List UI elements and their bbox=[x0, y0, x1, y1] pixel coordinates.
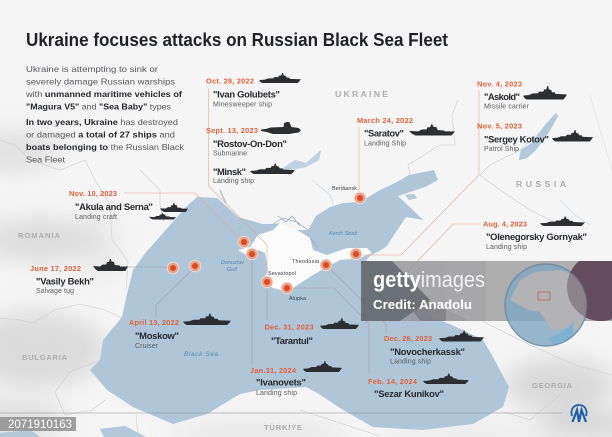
watermark band bbox=[361, 261, 612, 321]
intro text: or damaged a total of 27 ships and bbox=[26, 130, 175, 140]
leader lines bbox=[124, 88, 481, 374]
ship: Sezar Kunikov: Feb. 14, 2024 bbox=[368, 377, 418, 386]
ship: Ivan Golubets bbox=[206, 73, 301, 108]
ship: Akula and Serna: Nov. 10, 2023 bbox=[69, 189, 117, 198]
watermark line bbox=[0, 412, 562, 414]
place labels: Kerch Strait bbox=[329, 231, 358, 237]
ship: Ivanovets: Jan.31, 2024 bbox=[250, 366, 297, 375]
place labels: Black Sea bbox=[184, 351, 219, 358]
country labels bbox=[18, 89, 573, 432]
ship: Tarantul bbox=[264, 318, 359, 346]
intro text: severely damage Russian warships bbox=[26, 76, 175, 86]
ship: Akula and Serna: "Akula and Serna" bbox=[75, 201, 153, 212]
ship: Askold: "Askold" bbox=[484, 91, 520, 102]
intro text bbox=[25, 64, 185, 164]
ship: Vasily Bekh: Salvage tug bbox=[36, 288, 74, 295]
ship: Vasily Bekh bbox=[30, 259, 128, 295]
ship: Ivan Golubets: "Ivan Golubets" bbox=[213, 88, 280, 100]
ship: Novocherkassk: Landing ship bbox=[390, 358, 431, 366]
intro text: Sea Fleet bbox=[26, 154, 66, 164]
ship: Sezar Kunikov: "Sezar Kunikov" bbox=[374, 388, 444, 399]
Crimea bbox=[238, 223, 372, 292]
borders and rivers bbox=[0, 95, 612, 437]
attack location markers bbox=[167, 192, 399, 294]
place labels: Gulf bbox=[227, 267, 238, 273]
ship: Askold: Missile carrier bbox=[484, 104, 530, 110]
icon: Anadolu logo bbox=[571, 405, 587, 422]
place labels: Sevastopol bbox=[268, 271, 296, 277]
ship: Rostov-On-Don bbox=[206, 122, 301, 158]
country labels: ROMANIA bbox=[18, 231, 61, 240]
ship: Rostov-On-Don: "Rostov-On-Don" bbox=[213, 138, 287, 149]
ship: Ivan Golubets: Minesweeper ship bbox=[213, 102, 272, 108]
ship: Saratov: March 24, 2022 bbox=[357, 116, 413, 125]
ship: Ivanovets bbox=[250, 361, 342, 397]
ship: Sergey Kotov: Patrol Ship bbox=[484, 146, 519, 153]
ship: Olenegorsky Gornyak: Aug. 4, 2023 bbox=[483, 220, 527, 228]
intro text: Ukraine is attempting to sink or bbox=[26, 64, 158, 74]
ship: Akula and Serna: Landing craft bbox=[75, 214, 117, 221]
ship: Minsk: "Minsk" bbox=[213, 166, 246, 177]
watermark text bbox=[373, 267, 485, 312]
watermark text: Credit: Anadolu bbox=[373, 297, 472, 312]
ship: Sergey Kotov: Nov. 5, 2023 bbox=[477, 122, 522, 130]
country labels: TÜRKİYE bbox=[264, 423, 303, 432]
ship: Saratov: Landing Ship bbox=[364, 140, 406, 148]
place labels: Donuzlav bbox=[221, 260, 244, 266]
ship: Olenegorsky Gornyak: Landing ship bbox=[486, 244, 527, 251]
ship: Sezar Kunikov bbox=[368, 374, 469, 399]
ship: Saratov bbox=[357, 116, 455, 148]
ship: Ivan Golubets: Oct. 29, 2022 bbox=[206, 76, 254, 86]
ship: Vasily Bekh: "Vasily Bekh" bbox=[36, 276, 94, 286]
ship: Moskow: April 13, 2022 bbox=[129, 318, 179, 327]
ship: Tarantul: Dec. 31, 2023 bbox=[264, 322, 314, 332]
terrain shading bbox=[0, 128, 612, 437]
ship: Ivanovets: "Ivanovets" bbox=[256, 376, 306, 388]
ship: Tarantul: "Tarantul" bbox=[271, 335, 313, 346]
intro text: with unmanned maritime vehicles of bbox=[25, 89, 182, 99]
ship: Moskow: "Moskow" bbox=[135, 330, 179, 341]
title: Ukraine focuses attacks on Russian Black Sea Fleet bbox=[26, 30, 448, 50]
intro text: boats belonging to the Russian Black bbox=[26, 142, 185, 152]
ship: Minsk bbox=[213, 164, 295, 185]
ship: Saratov: "Saratov" bbox=[364, 128, 404, 138]
ship: Olenegorsky Gornyak bbox=[483, 216, 587, 251]
place labels bbox=[184, 186, 358, 358]
ship: Rostov-On-Don: Submarine bbox=[213, 150, 247, 158]
country labels: RUSSIA bbox=[516, 179, 567, 189]
ship: Ivanovets: Landing ship bbox=[256, 390, 297, 397]
Black Sea bbox=[90, 170, 509, 430]
ship: Moskow bbox=[129, 314, 231, 350]
image id badge: 2071910163 bbox=[8, 419, 72, 431]
Sivash marshes bbox=[273, 216, 318, 248]
ship: Askold: Nov. 4, 2023 bbox=[477, 80, 522, 88]
place labels: Berdiansk bbox=[332, 186, 357, 192]
ship: Vasily Bekh: June 17, 2022 bbox=[30, 264, 81, 273]
ship: Sergey Kotov: "Sergey Kotov" bbox=[484, 134, 549, 144]
ship: Olenegorsky Gornyak: "Olenegorsky Gornyak" bbox=[486, 231, 587, 242]
watermark dark circle bbox=[570, 261, 612, 321]
ship: Akula and Serna bbox=[69, 189, 188, 221]
intro text: In two years, Ukraine has destroyed bbox=[26, 117, 178, 127]
place labels: Alupka bbox=[289, 296, 306, 302]
ship: Novocherkassk: "Novocherkassk" bbox=[390, 346, 465, 357]
watermark text: gettyimages bbox=[373, 267, 485, 292]
locator globe bbox=[505, 253, 612, 348]
intro text: "Magura V5" and "Sea Baby" types bbox=[26, 102, 171, 112]
country labels: UKRAINE bbox=[335, 89, 389, 99]
ship: Sergey Kotov bbox=[477, 122, 593, 153]
ship: Minsk: Landing ship bbox=[213, 178, 254, 185]
rivers and reservoirs bbox=[0, 113, 590, 437]
ship: Novocherkassk: Dec. 26, 2023 bbox=[384, 334, 432, 343]
country labels: BULGARIA bbox=[22, 353, 68, 362]
ship: Askold bbox=[477, 80, 567, 110]
place labels: Theodosia bbox=[292, 259, 319, 265]
ship: Rostov-On-Don: Sept. 13, 2023 bbox=[206, 126, 258, 135]
country labels: GEORGIA bbox=[532, 381, 573, 390]
ship: Moskow: Cruiser bbox=[135, 343, 159, 350]
ship: Novocherkassk bbox=[384, 330, 484, 366]
